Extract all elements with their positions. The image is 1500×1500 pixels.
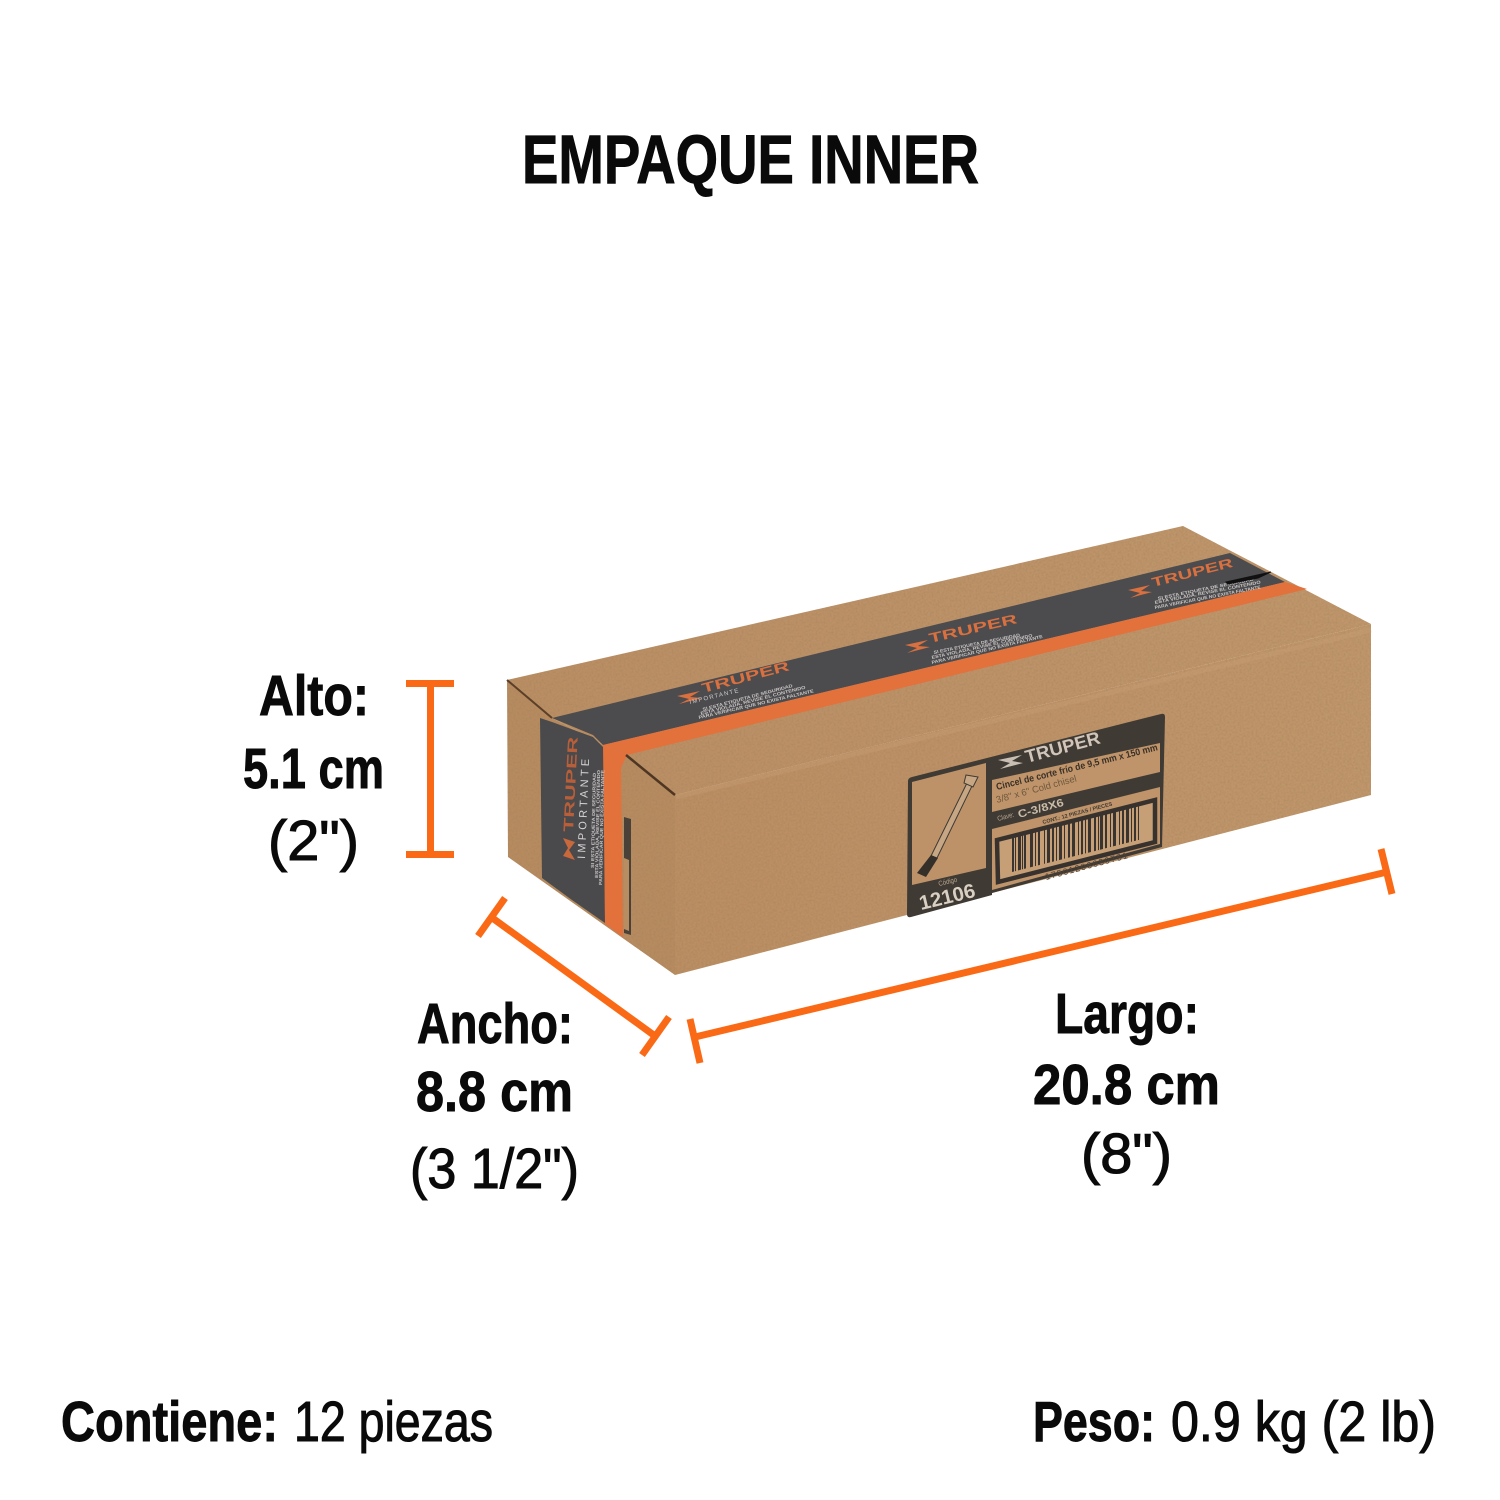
label: alto: Alto: — [259, 664, 369, 728]
product name: Cincel de corte frío de 9,5 mm x 150 mm — [995, 742, 1159, 793]
label: ancho: Ancho: — [417, 992, 573, 1056]
box: fold highlight — [676, 630, 1371, 797]
footer: peso: 0.9 kg (2 lb) — [1171, 1390, 1436, 1454]
tape logo two — [905, 611, 1043, 665]
footer: peso: Peso: — [1033, 1390, 1155, 1454]
label: alto: 5.1 cm — [243, 737, 384, 801]
english name: 3/8" x 6" Cold chisel — [995, 774, 1078, 806]
box: front face — [675, 624, 1371, 975]
chisel icon — [917, 775, 978, 877]
footer: contiene: Contiene: — [61, 1390, 278, 1454]
footer: contiene — [61, 1390, 493, 1454]
title: EMPAQUE INNER — [522, 121, 979, 198]
label: largo: Largo: — [1055, 982, 1199, 1046]
tape logo one — [677, 658, 814, 720]
chisel head — [964, 775, 978, 787]
cardboard box photo — [507, 526, 1371, 975]
codigo label: Código — [938, 877, 958, 888]
tape: orange band on end — [603, 745, 627, 937]
brand name: TRUPER — [1023, 728, 1102, 767]
fine print 1: SI ESTA ETIQUETA DE SEGURIDAD — [1157, 576, 1255, 601]
box: left end face — [507, 680, 675, 975]
fine print 2: ESTA VIOLADA, REVISE EL CONTENIDO — [700, 685, 807, 716]
fine print 2: ESTA VIOLADA, REVISE EL CONTENIDO — [594, 769, 601, 878]
lower cardboard area — [992, 787, 1160, 890]
label: ancho — [410, 992, 579, 1201]
clave label: Clave: — [997, 812, 1015, 823]
label: ancho: 8.8 cm — [416, 1060, 573, 1124]
label: alto: (2") — [268, 809, 359, 873]
tape crease — [1226, 572, 1271, 584]
chisel blade — [917, 855, 938, 877]
barcode — [997, 800, 1155, 882]
logo mark — [1128, 585, 1152, 598]
tape: orange band on top — [603, 582, 1307, 755]
logo text: TRUPER — [700, 658, 791, 696]
footer: peso — [1033, 1390, 1436, 1454]
cardboard area right of picture — [992, 743, 1160, 812]
logo text: TRUPER — [927, 611, 1019, 646]
fine print 3: PARA VERIFICAR QUE NO EXISTA FALTANTE — [598, 770, 605, 885]
product label — [907, 714, 1165, 917]
contents line: CONT.: 12 PIEZAS / PIECES — [1042, 801, 1113, 826]
fine print 3: PARA VERIFICAR QUE NO EXISTA FALTANTE — [1154, 585, 1261, 610]
logo text: TRUPER — [1150, 555, 1235, 590]
logo mark — [563, 838, 575, 860]
label: ancho: (3 1/2") — [410, 1137, 579, 1201]
chisel shaft — [931, 783, 972, 858]
dimension: alto marker — [406, 680, 454, 858]
footer: contiene: 12 piezas — [294, 1390, 493, 1454]
label: largo — [1033, 982, 1220, 1186]
barcode bars — [1012, 806, 1139, 872]
logo mark — [905, 640, 930, 653]
box: top face — [507, 526, 1371, 795]
fine print 2: ESTA VIOLADA, REVISE EL CONTENIDO — [1154, 579, 1262, 605]
box: flap slit right — [626, 755, 675, 795]
barcode digits: 17501206630751 — [1044, 850, 1129, 882]
barcode frame — [997, 800, 1155, 882]
brand mark — [998, 755, 1023, 769]
tape logo three — [1128, 555, 1262, 610]
label: largo: (8") — [1081, 1122, 1172, 1186]
logo text: TRUPER — [560, 736, 581, 832]
label fragment window — [624, 858, 629, 931]
logo mark — [677, 691, 702, 704]
fine print 3: PARA VERIFICAR QUE NO EXISTA FALTANTE — [931, 634, 1043, 665]
clave value: C-3/8X6 — [1017, 797, 1065, 821]
tape: dark band on top — [552, 553, 1285, 745]
codigo value: 12106 — [917, 880, 978, 915]
picture window — [912, 763, 986, 885]
fine print 3: PARA VERIFICAR QUE NO EXISTA FALTANTE — [698, 688, 814, 720]
label: alto — [243, 664, 384, 873]
label: largo: 20.8 cm — [1033, 1053, 1220, 1117]
fine print 1: SI ESTA ETIQUETA DE SEGURIDAD — [702, 683, 794, 712]
fine print 2: ESTA VIOLADA, REVISE EL CONTENIDO — [931, 633, 1033, 660]
tape logo on end — [560, 736, 605, 885]
dimension: ancho marker — [478, 898, 669, 1055]
brand logo — [998, 728, 1102, 769]
box: flap slit left — [507, 680, 552, 718]
fine print 1: SI ESTA ETIQUETA DE SEGURIDAD — [590, 772, 597, 868]
fine print 1: SI ESTA ETIQUETA DE SEGURIDAD — [933, 632, 1021, 655]
label dark base — [907, 714, 1165, 917]
importante text: IMPORTANTE — [576, 759, 592, 859]
importante word: IMPORTANTE — [689, 688, 739, 706]
label fragment on end — [624, 817, 631, 935]
tape: dark band on end — [540, 718, 605, 923]
dimension: largo marker — [690, 849, 1392, 1063]
